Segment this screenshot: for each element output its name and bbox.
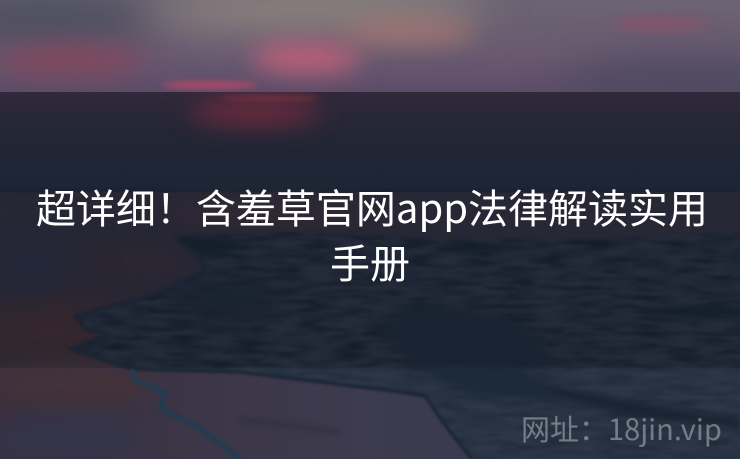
shoreline foam [71,236,472,459]
water and ripples [77,232,740,459]
title: 手册 [330,232,410,290]
shore [0,190,740,368]
title [36,177,708,290]
watermark: 网址：18jin.vip [521,407,722,449]
sea at horizon [0,92,740,142]
sky [0,0,740,92]
title: 超详细！含羞草官网app法律解读实用 [36,177,708,235]
